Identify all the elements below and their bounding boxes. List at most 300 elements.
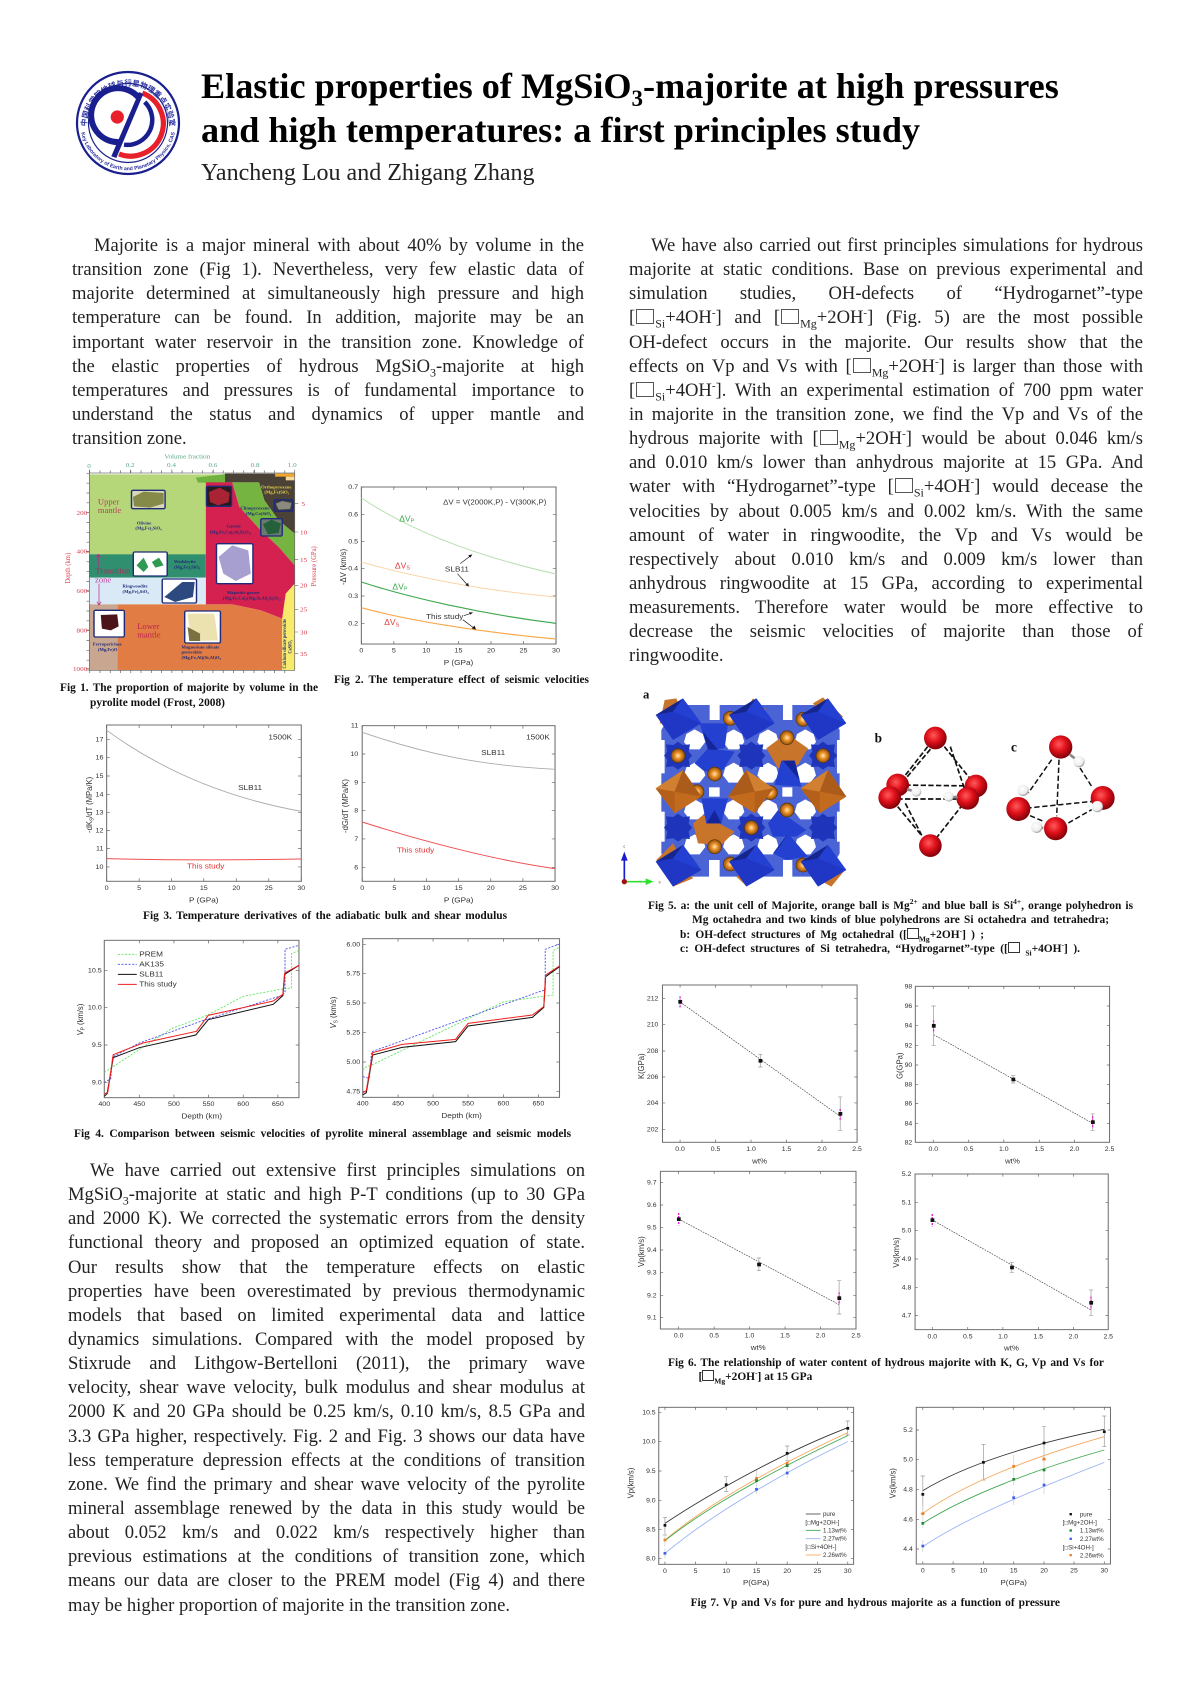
text block: simulation results: zone. We find the primary and shear wave velocity of the pyrolite <box>68 1474 585 1495</box>
chart: Fig 6 Vs vs water <box>892 1171 1113 1353</box>
chart: Fig 6 Vp vs water: 9.2 <box>647 1293 657 1300</box>
chart: Fig 3 right shear modulus derivative: -dG/dT (MPa/K) <box>341 778 350 833</box>
text block: introduction <box>72 235 584 449</box>
axis labels: 20 <box>300 583 308 589</box>
chart: Fig 6 Vs vs water: 1.5 <box>1034 1333 1043 1340</box>
chart: Fig 3 right shear modulus derivative: P (GPa) <box>444 896 474 904</box>
text block: simulation results: models that based on limited experimental data and lattice <box>68 1305 585 1326</box>
axis labels: 0 <box>87 463 91 470</box>
text block: introduction: understand the status and dynamics of upper mantle and <box>72 404 584 425</box>
chart: Fig 3 left bulk modulus derivative: P (GPa) <box>189 896 219 904</box>
axes icon: b <box>659 880 661 884</box>
text block: simulation results: about 0.052 km/s and 0.022 km/s respectively higher than <box>68 1522 585 1543</box>
chart: Fig 3 right shear modulus derivative <box>341 723 559 904</box>
text block: hydrous majorite: OH-defect occurs in the majorite. Our results show that the <box>629 332 1143 353</box>
chart: Fig 6 Vs vs water: 2.5 <box>1103 1333 1113 1340</box>
region labels: Lower <box>137 622 160 631</box>
text block: hydrous majorite: measurements. Therefore water would be more effective to <box>629 597 1143 618</box>
text block: simulation results: 2000 K and 20 GPa should be 0.25 km/s, 0.10 km/s, 8.5 GPa and <box>68 1401 585 1422</box>
axis labels: 30 <box>300 629 308 636</box>
chart: Fig 4 left Vp depth profile: P <box>80 1027 86 1030</box>
chart: Fig 3 left bulk modulus derivative: This study <box>187 861 225 870</box>
region labels: Ferropericlase <box>93 641 122 646</box>
chart: Fig 4 left Vp depth profile: (km/s) <box>76 1003 85 1027</box>
caption: Fig 6: [ Mg+2OH-] at 15 GPa <box>698 1369 812 1386</box>
chart: Fig 3 right shear modulus derivative: 7 <box>355 836 359 843</box>
text block: hydrous majorite: and 0.010 km/s lower than anhydrous majorite at 15 GPa. And <box>629 452 1143 473</box>
text block: simulation results: Stixrude and Lithgow-Bertelloni (2011), the primary wave <box>68 1353 585 1374</box>
chart: Fig 3 right shear modulus derivative: 10 <box>423 885 431 892</box>
chart: Fig 7 Vp vs pressure <box>627 1406 854 1587</box>
chart: Fig 3 right shear modulus derivative: 1500K <box>526 732 551 741</box>
chart: Fig 6 G vs water: 1.0 <box>999 1146 1009 1153</box>
text block: introduction: temperatures and pressures is of fundamental importance to <box>72 380 584 401</box>
chart: Fig 6 G vs water: 84 <box>904 1121 912 1128</box>
axis labels: 0.2 <box>126 462 135 469</box>
axis labels: 35 <box>300 651 308 658</box>
caption: Fig 2: Fig 2. The temperature effect of seismic velocities <box>334 674 589 686</box>
chart: Fig 6 Vp vs water: 9.6 <box>647 1202 657 1209</box>
region labels: Ringwoodite <box>122 583 147 588</box>
chart: Fig 2 temperature effect: P (GPa) <box>443 658 473 667</box>
legend: 2.27wt% <box>823 1536 847 1543</box>
chart: Fig 7 Vs vs pressure: 5.2 <box>903 1427 913 1434</box>
chart: Fig 6 K vs water: 1.5 <box>782 1146 792 1153</box>
chart: Fig 6 G vs water: 2.0 <box>1069 1146 1079 1153</box>
text block: hydrous majorite <box>629 235 1143 666</box>
region labels: mantle <box>137 630 161 639</box>
chart: Fig 6 Vp vs water <box>637 1170 861 1352</box>
chart: Fig 6 Vp vs water: 1.0 <box>745 1333 755 1340</box>
chart: Fig 4 left Vp depth profile <box>76 940 300 1120</box>
text block: hydrous majorite: effects on Vp and Vs with [ Mg+2OH-] is larger than those with <box>629 356 1143 379</box>
chart: Fig 6 Vs vs water: wt% <box>1003 1344 1019 1353</box>
chart: Fig 2 temperature effect: ΔV <box>384 617 395 627</box>
chart: Fig 3 left bulk modulus derivative: 10 <box>168 885 176 892</box>
text block: hydrous majorite: respectively about 0.010 km/s and 0.009 km/s lower than <box>629 549 1143 570</box>
chart: Fig 4 right Vs depth profile: 600 <box>497 1101 509 1108</box>
chart: Fig 7 Vp vs pressure: 8.5 <box>646 1527 656 1534</box>
chart: Fig 4 left Vp depth profile: 550 <box>203 1101 215 1108</box>
chart: Fig 3 right shear modulus derivative: 5 <box>393 885 397 892</box>
chart: Fig 6 G vs water <box>895 984 1114 1166</box>
chart: Fig 4 left Vp depth profile: 600 <box>237 1101 249 1108</box>
chart: Fig 7 Vp vs pressure: 10.5 <box>642 1409 656 1416</box>
region labels: Calcium silicate perovskite <box>282 619 287 668</box>
caption: Fig 5 <box>648 897 1133 957</box>
chart: Fig 6 K vs water <box>637 984 862 1166</box>
chart: Fig 6 Vs vs water: 4.9 <box>902 1256 912 1263</box>
chart: Fig 6 K vs water: 212 <box>647 996 659 1003</box>
chart: Fig 4 right Vs depth profile: 5.25 <box>346 1030 360 1036</box>
chart: Fig 6 Vp vs water: 0.0 <box>674 1333 684 1340</box>
chart: Fig 3 right shear modulus derivative: 20 <box>487 885 495 892</box>
chart: Fig 6 K vs water: 202 <box>647 1127 659 1134</box>
caption: Fig 1: pyrolite model (Frost, 2008) <box>90 697 225 709</box>
chart: Fig 7 Vs vs pressure: 4.6 <box>903 1516 913 1523</box>
legend: pure <box>1080 1511 1093 1518</box>
caption: Fig 5: Mg octahedra and two kinds of blue polyhedrons are Si octahedra and tetrahedra; <box>692 914 1109 926</box>
axes icon: c <box>624 844 626 848</box>
chart: Fig 3 left bulk modulus derivative: 10 <box>96 864 104 871</box>
chart: Fig 4 left Vp depth profile: V <box>76 1029 85 1035</box>
panel letter a: a <box>643 688 650 702</box>
chart: Fig 6 Vs vs water: 1.0 <box>998 1333 1008 1340</box>
chart: Fig 6 Vp vs water: 2.5 <box>851 1333 861 1340</box>
chart: Fig 6 K vs water: K(GPa) <box>637 1053 646 1079</box>
chart: Fig 4 left Vp depth profile: 500 <box>168 1101 180 1108</box>
chart: Fig 6 Vs vs water: 0.5 <box>963 1333 973 1340</box>
chart: Fig 6 G vs water: 0.0 <box>928 1146 938 1153</box>
text block: introduction: transition zone. <box>72 428 187 449</box>
chart: Fig 3 left bulk modulus derivative: 16 <box>96 755 104 761</box>
caption: Fig 6 <box>668 1357 1104 1386</box>
chart: Fig 6 Vs vs water: Vs(km/s) <box>892 1237 901 1268</box>
legend: [□Mg+2OH-] <box>1063 1520 1097 1527</box>
chart: Fig 6 K vs water: 0.5 <box>711 1146 721 1153</box>
chart: Fig 7 Vs vs pressure: 4.8 <box>903 1486 913 1493</box>
chart: Fig 3 left bulk modulus derivative: 15 <box>200 885 208 892</box>
chart: Fig 6 G vs water: 1.5 <box>1034 1146 1044 1153</box>
text block: hydrous majorite: [ Si+4OH-]. With an experimental estimation of 700 ppm water <box>629 380 1143 404</box>
text block: introduction: temperature can be found. In addition, majorite may be an <box>72 307 584 328</box>
chart: Fig 4 left Vp depth profile: 9.0 <box>92 1079 102 1086</box>
chart: Fig 7 Vs vs pressure: 30 <box>1100 1568 1108 1575</box>
text block: hydrous majorite: majorite at static conditions. Base on previous experimental and <box>629 259 1143 280</box>
chart: Fig 4 right Vs depth profile: (km/s) <box>328 996 338 1020</box>
chart: Fig 6 Vs vs water: 0.0 <box>928 1333 937 1340</box>
chart: Fig 3 left bulk modulus derivative: /dT (MPa/K) <box>85 776 94 818</box>
chart: Fig 7 Vp vs pressure: 10.0 <box>642 1439 656 1446</box>
legend: AK135 <box>139 960 165 968</box>
text block: hydrous majorite: amount of water in ringwoodite, the Vp and Vs would be <box>629 525 1143 546</box>
region labels: (Mg,Fe)O <box>98 647 118 652</box>
chart: Fig 4 left Vp depth profile: 9.5 <box>92 1042 102 1049</box>
chart: Fig 4 right Vs depth profile: 5.50 <box>346 1000 360 1007</box>
logo: 中国科学院地球与行星物理重点实验室 <box>80 79 176 126</box>
chart: Fig 3 left bulk modulus derivative: 11 <box>96 846 104 852</box>
title: and high temperatures: a first principles study <box>201 110 920 150</box>
chart: Fig 6 Vp vs water: 9.5 <box>647 1225 657 1232</box>
text block: hydrous majorite: simulation studies, OH-defects of “Hydrogarnet”-type <box>629 283 1143 304</box>
region labels: Magnesium silicate <box>181 644 219 649</box>
chart: Fig 2 temperature effect: 5 <box>392 647 396 654</box>
legend: 1.13wt% <box>823 1527 847 1534</box>
region labels <box>93 484 292 668</box>
chart: Fig 2 temperature effect: 20 <box>487 647 495 654</box>
chart: Fig 4 left Vp depth profile: 450 <box>133 1101 145 1108</box>
region labels: CaSiO₃ <box>287 639 292 653</box>
chart: Fig 6 G vs water: G(GPa) <box>895 1053 904 1079</box>
chart: Fig 3 left bulk modulus derivative: 15 <box>96 773 104 780</box>
chart: Fig 2 temperature effect: ΔV <box>395 560 406 570</box>
chart: Fig 6 G vs water: 94 <box>904 1023 912 1030</box>
text block: simulation results: may be higher proportion of majorite in the transition zone. <box>68 1595 510 1616</box>
axis labels <box>65 454 318 673</box>
chart: Fig 6 K vs water: 2.0 <box>817 1146 827 1153</box>
chart: Fig 3 left bulk modulus derivative <box>85 724 306 904</box>
text block: hydrous majorite: water with “Hydrogarnet”-type [ Si+4OH-] would decease the <box>629 476 1143 500</box>
chart: Fig 2 temperature effect: SLB11 <box>445 565 469 573</box>
region labels: Majoritic garnet <box>227 590 260 595</box>
chart: Fig 2 temperature effect: P <box>404 587 408 592</box>
region labels: mantle <box>98 506 121 515</box>
chart: Fig 6 Vp vs water: wt% <box>750 1343 766 1352</box>
caption: Fig 5: Fig 5. a: the unit cell of Majorite, orange ball is Mg2+ and blue ball is Si4+, orange polyhedron is <box>648 897 1133 912</box>
axis labels: 0.6 <box>208 462 218 469</box>
legend: 1.13wt% <box>1080 1528 1104 1535</box>
chart: Fig 6 G vs water: 86 <box>904 1101 912 1108</box>
chart: Fig 2 temperature effect: 0 <box>359 647 363 654</box>
chart: Fig 6 G vs water: 96 <box>904 1003 912 1010</box>
text block: simulation results: mineral assemblage renewed by the data in this study would be <box>68 1498 585 1519</box>
chart: Fig 6 Vs vs water: 5.1 <box>902 1199 912 1206</box>
region labels: perovskite <box>181 649 202 654</box>
caption: Fig 5: c: OH-defect structures of Si tetrahedra, “Hydrogarnet”-type ([ Si+4OH-] ). <box>680 940 1080 957</box>
text block: introduction: transition zone (Fig 1). Nevertheless, very few elastic data of <box>72 259 584 280</box>
region labels: (Mg,Fe)₂SiO₄ <box>122 589 149 594</box>
chart: Fig 7 Vp vs pressure: P(GPa) <box>743 1578 770 1587</box>
chart: Fig 3 left bulk modulus derivative: 13 <box>96 809 104 816</box>
text block: simulation results: properties have been overestimated by previous thermodynamic <box>68 1281 585 1302</box>
legend <box>806 1511 847 1559</box>
chart: Fig 6 K vs water: 0.0 <box>675 1146 685 1153</box>
chart: Fig 2 temperature effect: 0.7 <box>348 484 358 491</box>
chart: Fig 6 Vp vs water: Vp(km/s) <box>637 1236 646 1267</box>
chart: Fig 4 right Vs depth profile <box>328 938 560 1120</box>
axis labels: Depth (km) <box>65 553 72 583</box>
text block: simulation results: and 2000 K). We corrected the systematic errors from the density <box>68 1208 585 1229</box>
chart: Fig 4 right Vs depth profile: 5.00 <box>346 1059 360 1066</box>
axis labels: 25 <box>300 607 308 613</box>
figure: Fig 5a majorite unit cell <box>621 688 846 887</box>
caption: Fig 7: Fig 7. Vp and Vs for pure and hydrous majorite as a function of pressure <box>691 1597 1060 1609</box>
chart: Fig 7 Vp vs pressure: 15 <box>753 1568 761 1575</box>
chart: Fig 6 Vs vs water: 5.0 <box>902 1228 912 1235</box>
text block: hydrous majorite: anhydrous ringwoodite at 15 GPa, according to experimental <box>629 573 1143 594</box>
chart: Fig 3 right shear modulus derivative: This study <box>397 845 435 854</box>
axis labels: 0.8 <box>251 462 260 469</box>
chart: Fig 3 left bulk modulus derivative: SLB11 <box>238 783 263 792</box>
region labels: (Mg,Fe,Ca)₃(Mg,Si,Al)₂Si₃O₁₂ <box>223 595 281 600</box>
legend <box>1063 1511 1104 1559</box>
title: Elastic properties of MgSiO3-majorite at high pressures <box>201 66 1059 111</box>
mineral photos <box>94 486 293 643</box>
chart: Fig 7 Vs vs pressure: 20 <box>1040 1568 1048 1575</box>
caption: Fig 3: Fig 3. Temperature derivatives of the adiabatic bulk and shear modulus <box>143 910 507 922</box>
region labels: (Mg,Fe,Al)(Si,Al)O₃ <box>181 655 221 660</box>
chart: Fig 2 temperature effect: 15 <box>454 647 462 654</box>
axis labels: 1000 <box>73 666 88 673</box>
chart: Fig 2 temperature effect: 0.2 <box>348 620 358 627</box>
chart: Fig 4 right Vs depth profile: Depth (km) <box>441 1111 482 1120</box>
chart: Fig 6 Vp vs water: 9.1 <box>647 1315 657 1322</box>
chart: Fig 7 Vp vs pressure: 30 <box>844 1568 852 1575</box>
chart: Fig 2 temperature effect: 25 <box>519 647 527 654</box>
chart: Fig 2 temperature effect: 0.6 <box>348 511 358 518</box>
chart: Fig 2 temperature effect: -ΔV (km/s) <box>338 548 348 585</box>
axis labels: 15 <box>300 557 308 564</box>
chart: Fig 6 K vs water: 204 <box>647 1100 659 1107</box>
region labels: Upper <box>98 498 119 506</box>
text block: hydrous majorite: [ Si+4OH-] and [ Mg+2OH-] (Fig. 5) are the most possible <box>629 307 1143 331</box>
chart: Fig 6 G vs water: 0.5 <box>964 1146 974 1153</box>
chart: Fig 7 Vp vs pressure: 10 <box>723 1568 730 1575</box>
chart: Fig 2 temperature effect: 0.5 <box>348 539 358 545</box>
chart: Fig 3 left bulk modulus derivative: -dK <box>85 821 94 833</box>
chart: Fig 7 Vs vs pressure: 15 <box>1010 1568 1018 1575</box>
caption: Fig 4: Fig 4. Comparison between seismic velocities of pyrolite mineral assemblage and seismic models <box>74 1128 571 1140</box>
region labels: Orthopyroxene <box>261 484 291 489</box>
chart: Fig 6 K vs water: 210 <box>647 1022 659 1029</box>
axis labels: 10 <box>300 529 308 536</box>
figure: Fig 5b Mg octahedral defect <box>874 726 988 857</box>
text block: simulation results: 3.3 GPa higher, respectively. Fig. 2 and Fig. 3 shows our data have <box>68 1426 585 1447</box>
chart: Fig 2 temperature effect: 30 <box>552 647 560 654</box>
region labels: Transition <box>95 566 131 575</box>
region labels: (Mg,Fe)SiO₃ <box>264 489 290 494</box>
chart: Fig 7 Vp vs pressure: 9.5 <box>646 1468 656 1475</box>
chart: Fig 7 Vp vs pressure: 5 <box>694 1568 698 1575</box>
legend: [□Si+4OH-] <box>806 1544 837 1551</box>
chart: Fig 6 Vs vs water: 4.8 <box>902 1284 912 1291</box>
chart: Fig 6 Vp vs water: 9.7 <box>647 1180 657 1187</box>
text block: simulation results: less temperature depression effects at the conditions of transition <box>68 1450 585 1471</box>
text block: hydrous majorite: decrease the seismic velocities of majorite than those of <box>629 621 1143 642</box>
chart: Fig 4 right Vs depth profile: 400 <box>357 1101 369 1108</box>
chart: Fig 7 Vp vs pressure: 20 <box>784 1568 791 1575</box>
text block: hydrous majorite: ringwoodite. <box>629 645 724 666</box>
figure: Fig 5c Si tetrahedral defect: c <box>1011 740 1017 755</box>
logo: Key Laboratory of Earth and Planetary Physics, CAS <box>81 132 175 170</box>
chart: Fig 6 K vs water: wt% <box>751 1157 767 1166</box>
axis labels: 200 <box>76 510 88 517</box>
chart: Fig 4 right Vs depth profile: 500 <box>427 1101 439 1108</box>
chart: Fig 6 Vp vs water: 9.3 <box>647 1270 657 1277</box>
text block: hydrous majorite: velocities by about 0.005 km/s and 0.002 km/s. With the same <box>629 501 1143 522</box>
chart: Fig 7 Vs vs pressure: 25 <box>1070 1568 1078 1575</box>
axis labels: Volume fraction <box>164 454 211 460</box>
chart: Fig 7 Vs vs pressure <box>888 1406 1111 1587</box>
chart: Fig 3 left bulk modulus derivative: 20 <box>232 885 241 892</box>
chart: Fig 6 G vs water: 82 <box>904 1140 912 1147</box>
chart: Fig 4 right Vs depth profile: V <box>328 1023 338 1028</box>
chart: Fig 6 K vs water: 2.5 <box>852 1146 862 1153</box>
chart: Fig 3 right shear modulus derivative: 8 <box>355 808 359 814</box>
chart: Fig 3 right shear modulus derivative: 30 <box>551 885 559 892</box>
chart: Fig 3 left bulk modulus derivative: 0 <box>105 885 109 892</box>
chart: Fig 3 left bulk modulus derivative: 5 <box>137 885 141 892</box>
axis labels: 5 <box>301 501 306 508</box>
legend: 2.27wt% <box>1080 1536 1104 1543</box>
chart: Fig 6 G vs water: 88 <box>904 1082 912 1089</box>
text block: simulation results: MgSiO3-majorite at static and high P-T conditions (up to 30 GPa <box>68 1184 585 1208</box>
chart: Fig 3 right shear modulus derivative: 9 <box>355 779 359 786</box>
chart: Fig 2 temperature effect: 10 <box>422 647 430 654</box>
polyhedra <box>656 697 847 887</box>
chart: Fig 3 right shear modulus derivative: 11 <box>351 723 359 729</box>
chart: Fig 6 Vp vs water: 2.0 <box>816 1333 826 1340</box>
legend: [□Si+4OH-] <box>1063 1544 1094 1551</box>
chart: Fig 6 Vs vs water: 4.7 <box>902 1313 912 1320</box>
chart: Fig 3 left bulk modulus derivative: 25 <box>265 885 273 892</box>
region labels: (Mg,Fe)₂SiO₄ <box>135 525 162 530</box>
legend <box>118 950 177 988</box>
chart: Fig 6 G vs water: wt% <box>1004 1157 1020 1166</box>
legend: [□Mg+2OH-] <box>806 1519 840 1526</box>
title <box>201 66 1059 150</box>
legend: pure <box>823 1511 836 1518</box>
chart: Fig 2 temperature effect: S <box>406 566 410 571</box>
chart: Fig 7 Vp vs pressure: 9.0 <box>646 1497 656 1504</box>
chart: Fig 7 Vs vs pressure: Vs(km/s) <box>888 1468 898 1498</box>
chart: Fig 3 left bulk modulus derivative: S <box>89 818 96 821</box>
chart: Fig 7 Vp vs pressure: 25 <box>814 1568 822 1575</box>
text block: simulation results: We have carried out extensive first principles simulations on <box>90 1160 585 1181</box>
chart: Fig 4 left Vp depth profile: Depth (km) <box>181 1111 222 1120</box>
text block: hydrous majorite: in majorite in the transition zone, we find the Vp and Vs of the <box>629 404 1143 425</box>
axis labels: 400 <box>76 549 88 555</box>
chart: Fig 7 Vp vs pressure: 0 <box>663 1568 667 1575</box>
axis labels: 0.4 <box>167 462 176 469</box>
region labels: zone <box>95 575 111 584</box>
chart: Fig 2 temperature effect <box>338 484 560 667</box>
text block: introduction: majorite determined at simultaneously high pressure and high <box>72 283 584 304</box>
legend: 2.26wt% <box>1080 1552 1104 1559</box>
chart: Fig 4 right Vs depth profile: 650 <box>532 1101 544 1108</box>
text block: simulation results: dynamics simulations. Compared with the model proposed by <box>68 1329 585 1350</box>
chart: Fig 3 right shear modulus derivative: 25 <box>519 885 527 892</box>
text block: simulation results: velocity, shear wave velocity, bulk modulus and shear modulus at <box>68 1377 585 1398</box>
chart: Fig 1 mantle mineral proportion <box>64 454 318 673</box>
chart: Fig 3 right shear modulus derivative: 10 <box>351 751 359 758</box>
region labels: Olivine <box>137 520 151 525</box>
chart: Fig 2 temperature effect: This study <box>426 612 463 621</box>
caption: Fig 6: Fig 6. The relationship of water content of hydrous majorite with K, G, Vp and Vs for <box>668 1357 1104 1369</box>
text block: simulation results: Our results show that the temperature effects on elastic <box>68 1257 585 1278</box>
chart: Fig 7 Vs vs pressure: P(GPa) <box>1000 1578 1027 1587</box>
chart: Fig 2 temperature effect: 0.3 <box>348 593 358 600</box>
chart: Fig 4 left Vp depth profile: 10.0 <box>88 1005 102 1011</box>
chart: Fig 4 left Vp depth profile: 10.5 <box>88 967 102 974</box>
chart: Fig 6 K vs water: 208 <box>647 1048 659 1055</box>
chart: Fig 6 Vp vs water: 9.4 <box>647 1247 657 1254</box>
caption: Fig 5: b: OH-defect structures of Mg octahedral ([ Mg+2OH-] ) ; <box>680 926 984 943</box>
text block: introduction: Majorite is a major mineral with about 40% by volume in the <box>94 235 584 256</box>
legend: PREM <box>139 950 163 958</box>
text block: hydrous majorite: We have also carried out first principles simulations for hydrous <box>651 235 1143 256</box>
legend: SLB11 <box>139 970 164 978</box>
chart: Fig 6 G vs water: 98 <box>904 984 912 991</box>
chart: Fig 4 right Vs depth profile: 450 <box>392 1101 404 1108</box>
text block: hydrous majorite: hydrous majorite with [ Mg+2OH-] would be about 0.046 km/s <box>629 428 1143 452</box>
chart: Fig 6 K vs water: 1.0 <box>746 1146 756 1153</box>
chart: Fig 4 right Vs depth profile: 550 <box>462 1101 474 1108</box>
axis labels: Pressure (GPa) <box>311 546 318 586</box>
chart: Fig 4 right Vs depth profile: 4.75 <box>346 1089 360 1095</box>
chart: Fig 3 left bulk modulus derivative: 14 <box>96 791 104 798</box>
chart: Fig 4 right Vs depth profile: S <box>333 1020 339 1023</box>
caption: Fig 1: Fig 1. The proportion of majorite by volume in the <box>60 682 318 694</box>
chart: Fig 4 left Vp depth profile: 400 <box>98 1101 110 1108</box>
axis labels: 600 <box>76 588 88 595</box>
chart: Fig 2 temperature effect: ΔV <box>399 513 410 523</box>
chart: Fig 6 G vs water: 92 <box>904 1043 912 1050</box>
chart: Fig 7 Vs vs pressure: 10 <box>979 1568 987 1575</box>
region labels: (Mg,Ca)SiO₃ <box>246 511 272 516</box>
chart: Fig 7 Vs vs pressure: 4.4 <box>903 1546 913 1553</box>
chart: Fig 2 temperature effect: ΔV = V(2000K,P) - V(300K,P) <box>443 497 547 506</box>
